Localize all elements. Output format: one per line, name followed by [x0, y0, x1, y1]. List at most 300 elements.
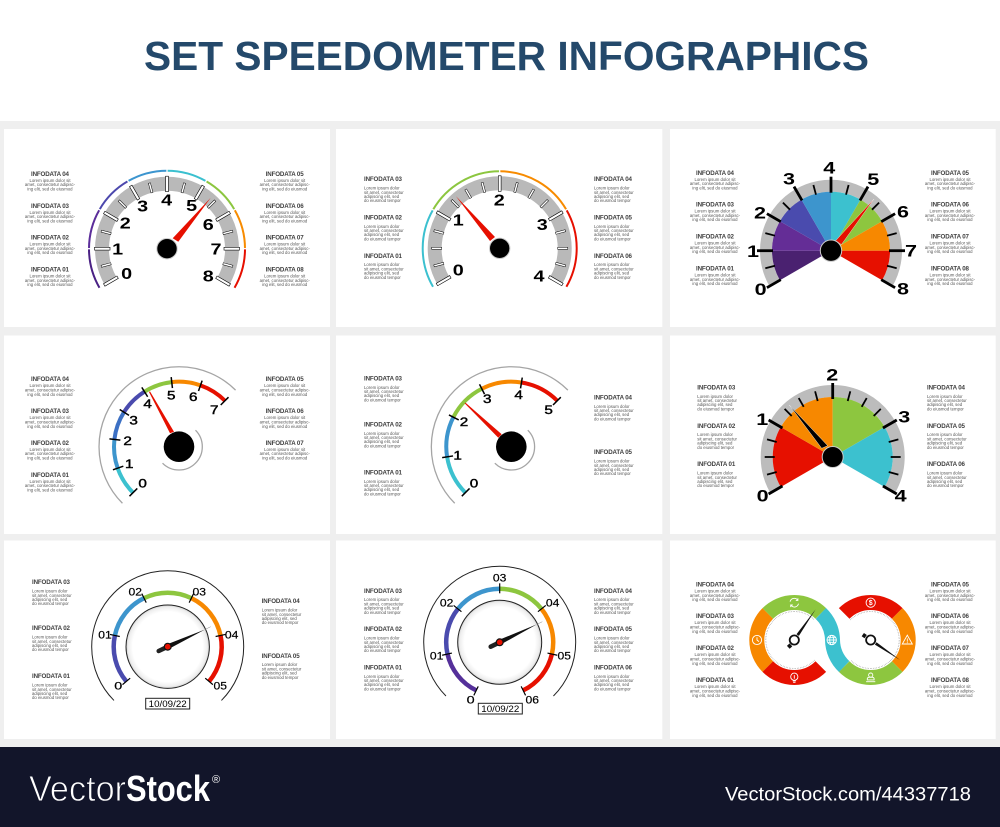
text block: INFODATA 04: Lorem ipsum dolor [594, 186, 630, 190]
text block: INFODATA 02: ing elit, sed do eiusmod [692, 661, 738, 666]
text block: INFODATA 04: do eiusmod tempor [594, 198, 631, 203]
text block: INFODATA 06: INFODATA 06 [594, 253, 633, 260]
text block: INFODATA 04 [25, 376, 76, 397]
footer logo: VectorStock: Stock [126, 768, 211, 809]
text block: INFODATA 06 [925, 202, 976, 222]
text block: INFODATA 02: INFODATA 02 [31, 440, 70, 447]
text block: INFODATA 03: INFODATA 03 [364, 588, 403, 595]
gauge numbers 0 to 7: 6 [189, 392, 198, 404]
text block: INFODATA 01: sit amet, consectetur [32, 687, 72, 692]
gauge numbers 0 to 8: 2 [754, 203, 766, 222]
text block: INFODATA 03: adipiscing elit, sed [364, 606, 400, 611]
text block: INFODATA 05: INFODATA 05 [594, 449, 633, 456]
text block: INFODATA 07: INFODATA 07 [931, 645, 970, 652]
text block: INFODATA 07: INFODATA 07 [266, 440, 304, 447]
gauge numbers 0 to 4: 2 [494, 193, 505, 210]
text block: INFODATA 02: Lorem ipsum dolor sit [29, 242, 71, 247]
text block: INFODATA 06: INFODATA 06 [266, 203, 304, 210]
icon: dollar [866, 598, 875, 607]
text block: INFODATA 06: do eiusmod tempor [594, 275, 631, 280]
text block: INFODATA 02: INFODATA 02 [696, 645, 735, 652]
text block: INFODATA 03: ing elit, sed do eiusmod [27, 424, 73, 429]
gauge numbers 0 to 7: 7 [210, 405, 219, 417]
text block: INFODATA 06: Lorem ipsum dolor sit [929, 209, 971, 214]
text block: INFODATA 03: INFODATA 03 [696, 613, 735, 620]
text block: INFODATA 04: Lorem ipsum dolor sit [694, 177, 736, 182]
text block: INFODATA 02: adipiscing elit, sed [364, 644, 400, 649]
text block: INFODATA 01: INFODATA 01 [31, 472, 70, 479]
text block: INFODATA 04: Lorem ipsum dolor sit [694, 588, 736, 593]
text block: INFODATA 01: do eiusmod tempor [364, 275, 401, 280]
text block: INFODATA 03 [364, 588, 404, 615]
text block: INFODATA 02 [690, 645, 741, 666]
gauge numbers 0 to 8: 5 [867, 170, 879, 189]
gauge numbers 0 to 5 [453, 390, 553, 490]
gauge numbers 0 to 4: 4 [534, 268, 545, 285]
text block: INFODATA 04: sit amet, consectetur [594, 602, 634, 607]
text block: INFODATA 05: amet, consectetur adipisc- [260, 182, 310, 187]
text block: INFODATA 05: ing elit, sed do eiusmod [262, 392, 308, 397]
text block: INFODATA 01: adipiscing elit, sed [697, 479, 733, 484]
text block: INFODATA 04: INFODATA 04 [696, 581, 735, 588]
text block: INFODATA 08: amet, consectetur adipisc- [925, 277, 976, 282]
text block: INFODATA 02: ing elit, sed do eiusmod [27, 456, 73, 461]
text block: INFODATA 01 [697, 461, 738, 488]
text block: INFODATA 03: do eiusmod tempor [364, 198, 401, 203]
gauge arcs and ticks [431, 367, 568, 503]
text block: INFODATA 05: Lorem ipsum dolor [594, 458, 630, 464]
gauge numbers 0 to 06: 06 [526, 694, 539, 706]
text block: INFODATA 04: INFODATA 04 [31, 376, 70, 383]
text block: INFODATA 02: Lorem ipsum dolor sit [694, 652, 736, 657]
gauge numbers 0 to 06 [430, 573, 571, 706]
text block: INFODATA 01: INFODATA 01 [364, 469, 403, 476]
text block: INFODATA 08: Lorem ipsum dolor sit [929, 272, 971, 277]
text block: INFODATA 02: INFODATA 02 [364, 215, 403, 222]
text block: INFODATA 04: adipiscing elit, sed [594, 412, 630, 417]
icon: person [866, 673, 875, 682]
text block: INFODATA 02 [25, 234, 76, 255]
gauge numbers 0 to 4: 3 [898, 408, 910, 427]
text block: INFODATA 06 [260, 408, 310, 429]
text block: INFODATA 04 [927, 384, 967, 412]
text block: INFODATA 06: sit amet, consectetur [927, 475, 967, 480]
text block: INFODATA 05: amet, consectetur adipisc- [925, 181, 976, 186]
text block: INFODATA 03 [690, 202, 741, 222]
text block: INFODATA 04: INFODATA 04 [927, 384, 966, 391]
gauge numbers 0 to 8: 0 [755, 280, 767, 299]
text block: INFODATA 04: INFODATA 04 [262, 598, 300, 605]
text block: INFODATA 02 [25, 440, 76, 460]
text block: INFODATA 07 [260, 440, 310, 460]
text block: INFODATA 05: INFODATA 05 [931, 581, 970, 588]
text block: INFODATA 02 [364, 422, 404, 448]
needle: red [149, 391, 174, 433]
text block: INFODATA 06: INFODATA 06 [594, 664, 633, 671]
text block: INFODATA 06: do eiusmod tempor [594, 686, 631, 691]
gauge numbers 0 to 06: 03 [493, 573, 506, 585]
text block: INFODATA 04: ing elit, sed do eiusmod [27, 186, 73, 191]
pie dial with sectors, grey band and ticks [765, 383, 901, 494]
text block: INFODATA 06: Lorem ipsum dolor [927, 470, 963, 476]
date box: 10/09/22 [149, 699, 187, 709]
text block: INFODATA 08: Lorem ipsum dolor sit [264, 273, 306, 278]
gauge numbers 0 to 8: 6 [203, 217, 214, 234]
text block: INFODATA 04: adipiscing elit, sed [594, 606, 630, 611]
text block: INFODATA 02: do eiusmod tempor [32, 647, 69, 652]
text block: INFODATA 05: sit amet, consectetur [927, 437, 967, 442]
text block: INFODATA 03: Lorem ipsum dolor [32, 588, 68, 594]
gauge numbers 0 to 7: 5 [167, 390, 176, 402]
text block: INFODATA 02: adipiscing elit, sed [32, 643, 68, 648]
text block: INFODATA 08 [925, 266, 976, 286]
left needle [788, 609, 816, 647]
text block: INFODATA 05: ing elit, sed do eiusmod [262, 186, 308, 191]
text block: INFODATA 01 [32, 673, 72, 700]
gauge numbers 0 to 7: 1 [125, 459, 134, 471]
text block: INFODATA 07: Lorem ipsum dolor sit [929, 241, 971, 246]
text block: INFODATA 05: Lorem ipsum dolor sit [264, 383, 306, 388]
gauge numbers 0 to 4: 4 [895, 487, 907, 506]
text block: INFODATA 02: INFODATA 02 [31, 235, 70, 242]
text block: INFODATA 04: ing elit, sed do eiusmod [692, 185, 738, 190]
text block: INFODATA 03: adipiscing elit, sed [364, 194, 400, 199]
gauge numbers 0 to 06: 05 [558, 650, 571, 662]
text block: INFODATA 03 [25, 203, 76, 224]
text block: INFODATA 01: adipiscing elit, sed [364, 270, 400, 275]
text block: INFODATA 01: Lorem ipsum dolor sit [29, 479, 71, 484]
panel: gauge 1, eight-step banded speedometer [4, 129, 330, 327]
text block: INFODATA 01: adipiscing elit, sed [32, 691, 68, 696]
text block: INFODATA 06: Lorem ipsum dolor sit [264, 210, 306, 215]
icon: light bulb [791, 673, 798, 682]
text block: INFODATA 02: amet, consectetur adipisc- [690, 245, 741, 250]
text block: INFODATA 06: amet, consectetur adipisc- [925, 213, 976, 218]
text block: INFODATA 06: INFODATA 06 [931, 202, 970, 209]
gauge numbers 0 to 8 [747, 159, 917, 299]
text block: INFODATA 04: do eiusmod tempor [927, 406, 964, 411]
text block: INFODATA 02 [364, 626, 404, 653]
text block: INFODATA 02: adipiscing elit, sed [364, 232, 400, 237]
gauge numbers 0 to 4 [453, 193, 548, 285]
text block: INFODATA 01: Lorem ipsum dolor [697, 470, 733, 476]
text block: INFODATA 04: ing elit, sed do eiusmod [692, 597, 738, 602]
text block: INFODATA 04: amet, consectetur adipisc- [690, 181, 741, 186]
text block: INFODATA 07 [260, 234, 310, 255]
text block: INFODATA 02 [364, 214, 404, 242]
text block: INFODATA 01: amet, consectetur adipisc- [25, 278, 76, 283]
text block: INFODATA 04: sit amet, consectetur [927, 398, 967, 403]
text block: INFODATA 02: do eiusmod tempor [364, 443, 401, 448]
text block: INFODATA 02: adipiscing elit, sed [697, 441, 733, 446]
text block: INFODATA 06: sit amet, consectetur [594, 678, 634, 683]
gauge numbers 0 to 8: 1 [112, 242, 124, 259]
text block: INFODATA 06: sit amet, consectetur [594, 266, 634, 271]
text block: INFODATA 02: sit amet, consectetur [364, 435, 404, 440]
text block: INFODATA 03: Lorem ipsum dolor sit [29, 210, 71, 215]
text block: INFODATA 02 [697, 423, 738, 450]
panel: gauge 4, eight-tick open arc speedometer [4, 336, 330, 534]
needle: black [789, 405, 828, 448]
text block: INFODATA 05: INFODATA 05 [262, 653, 300, 660]
text block: INFODATA 01: INFODATA 01 [697, 461, 736, 468]
text block: INFODATA 02: sit amet, consectetur [364, 228, 404, 233]
text block: INFODATA 05: adipiscing elit, sed [594, 232, 630, 237]
gauge dial with band, coloured arcs and ticks [86, 168, 248, 288]
text block: INFODATA 06: amet, consectetur adipisc- [260, 420, 310, 424]
text block: INFODATA 02: Lorem ipsum dolor sit [29, 447, 71, 452]
text block: INFODATA 01: Lorem ipsum dolor [364, 479, 400, 484]
text block: INFODATA 04: Lorem ipsum dolor sit [29, 383, 71, 388]
text block: INFODATA 06: INFODATA 06 [931, 613, 970, 620]
text block: INFODATA 06 [925, 613, 976, 634]
text block: INFODATA 01: adipiscing elit, sed [364, 487, 400, 492]
gauge numbers 0 to 4: 2 [826, 365, 838, 384]
text block: INFODATA 02 [32, 625, 72, 652]
text block: INFODATA 01 [25, 472, 76, 492]
text block: INFODATA 05 [260, 376, 310, 397]
text block: INFODATA 01: Lorem ipsum dolor sit [694, 272, 736, 277]
text block: INFODATA 02: amet, consectetur adipisc- [25, 451, 76, 456]
text block: INFODATA 08: ing elit, sed do eiusmod [927, 281, 973, 286]
text block: INFODATA 03 [697, 384, 738, 412]
gauge numbers 0 to 05: 03 [193, 587, 206, 599]
text block: INFODATA 05: ing elit, sed do eiusmod [927, 597, 973, 602]
text block: INFODATA 05 [927, 423, 967, 450]
dial with coloured arcs and ticks [424, 566, 576, 696]
text block: INFODATA 01: INFODATA 01 [364, 253, 403, 260]
text block: INFODATA 01: Lorem ipsum dolor [32, 682, 68, 688]
gauge numbers 0 to 06: 02 [440, 597, 453, 609]
text block: INFODATA 03: ing elit, sed do eiusmod [692, 217, 738, 222]
dial with coloured arcs and ticks [92, 571, 244, 700]
text block: INFODATA 06: Lorem ipsum dolor [594, 262, 630, 267]
text block: INFODATA 01: sit amet, consectetur [364, 483, 404, 488]
text block: INFODATA 03: Lorem ipsum dolor [364, 385, 400, 390]
text block: INFODATA 01: INFODATA 01 [364, 664, 403, 671]
gauge numbers 0 to 8: 5 [186, 198, 198, 215]
text block: INFODATA 03: INFODATA 03 [31, 203, 70, 210]
text block: INFODATA 05: INFODATA 05 [931, 170, 970, 177]
text block: INFODATA 03: Lorem ipsum dolor sit [29, 415, 71, 420]
needle hub [820, 240, 842, 261]
text block: INFODATA 01: do eiusmod tempor [364, 491, 401, 496]
text block: INFODATA 05: do eiusmod tempor [262, 675, 299, 680]
footer bar [0, 747, 1000, 827]
text block: INFODATA 06: adipiscing elit, sed [594, 270, 630, 275]
text block: INFODATA 03: sit amet, consectetur [364, 389, 404, 394]
text block: INFODATA 01: INFODATA 01 [696, 677, 735, 684]
text block: INFODATA 04 [25, 171, 76, 192]
text block: INFODATA 03: sit amet, consectetur [364, 602, 404, 607]
gauge numbers 0 to 7: 3 [129, 415, 138, 427]
text block: INFODATA 03: sit amet, consectetur [364, 190, 404, 195]
text block: INFODATA 04: adipiscing elit, sed [594, 194, 630, 199]
text block: INFODATA 04: ing elit, sed do eiusmod [27, 392, 73, 397]
gauge numbers 0 to 7: 2 [123, 436, 132, 448]
text block: INFODATA 03: Lorem ipsum dolor [697, 394, 733, 399]
text block: INFODATA 04: Lorem ipsum dolor [594, 404, 630, 409]
text block: INFODATA 01: adipiscing elit, sed [364, 682, 400, 687]
text block: INFODATA 05: adipiscing elit, sed [927, 441, 963, 446]
text block: INFODATA 04: amet, consectetur adipisc- [690, 593, 741, 598]
text block: INFODATA 02: Lorem ipsum dolor sit [694, 241, 736, 246]
text block: INFODATA 06: Lorem ipsum dolor [594, 674, 630, 679]
text block: INFODATA 03: amet, consectetur adipisc- [690, 624, 741, 630]
gauge numbers 0 to 8: 8 [897, 279, 909, 298]
text block: INFODATA 04: INFODATA 04 [31, 171, 70, 178]
panel: gauge 5, five-tick open arc speedometer [336, 336, 662, 534]
text block: INFODATA 08: INFODATA 08 [266, 266, 304, 273]
title: SET SPEEDOMETER INFOGRAPHICS [144, 33, 869, 79]
text block: INFODATA 01: ing elit, sed do eiusmod [27, 282, 73, 287]
text block: INFODATA 01: Lorem ipsum dolor [364, 262, 400, 267]
text block: INFODATA 01: amet, consectetur adipisc- [690, 688, 741, 694]
text block: INFODATA 04: INFODATA 04 [594, 176, 633, 183]
text block: INFODATA 01: sit amet, consectetur [697, 475, 738, 480]
text block: INFODATA 01: amet, consectetur adipisc- [25, 483, 76, 488]
text block: INFODATA 05: do eiusmod tempor [594, 648, 631, 653]
panel: gauge 9, infinity double dial with icons [670, 540, 996, 739]
text block: INFODATA 04: INFODATA 04 [594, 588, 633, 595]
text block: INFODATA 05 [260, 171, 310, 192]
panel: gauge 3, eight-sector pie speedometer [670, 129, 996, 327]
text block: INFODATA 02: INFODATA 02 [696, 234, 735, 241]
text block: INFODATA 08: Lorem ipsum dolor sit [929, 684, 971, 689]
text block: INFODATA 05: sit amet, consectetur [262, 667, 302, 672]
text block: INFODATA 03: INFODATA 03 [32, 579, 71, 586]
needle: red [465, 403, 502, 438]
text block: INFODATA 02: amet, consectetur adipisc- [690, 656, 741, 662]
text block: INFODATA 07: amet, consectetur adipisc- [260, 451, 310, 456]
gauge numbers 0 to 4: 3 [537, 217, 548, 234]
text block: INFODATA 04: Lorem ipsum dolor [927, 394, 963, 399]
text block: INFODATA 03: Lorem ipsum dolor [364, 186, 400, 190]
dotted dial scales [766, 611, 899, 668]
text block: INFODATA 01: Lorem ipsum dolor [364, 674, 400, 679]
panel: gauge 6, four-sector pie speedometer [670, 336, 996, 534]
text block: INFODATA 06: ing elit, sed do eiusmod [927, 629, 973, 634]
needle hub [496, 431, 527, 462]
text block: INFODATA 05: adipiscing elit, sed [594, 644, 630, 649]
gauge numbers 0 to 4 [756, 365, 910, 506]
text block: INFODATA 01: Lorem ipsum dolor sit [29, 273, 71, 278]
text block: INFODATA 05 [925, 170, 976, 190]
text block: INFODATA 06: ing elit, sed do eiusmod [927, 217, 973, 222]
text block: INFODATA 03: do eiusmod tempor [697, 406, 735, 411]
panel: gauge 7, five-segment round dial with date [4, 540, 330, 739]
text block: INFODATA 07 [925, 234, 976, 254]
text block: INFODATA 03 [364, 176, 404, 203]
gauge numbers 0 to 8: 6 [897, 203, 909, 222]
gauge numbers 0 to 8: 7 [905, 242, 917, 261]
text block: INFODATA 03 [32, 579, 72, 606]
icon: dollar: $ [869, 600, 873, 607]
text block: INFODATA 05: sit amet, consectetur [594, 640, 634, 645]
needle: red [836, 199, 874, 245]
text block: INFODATA 03: do eiusmod tempor [32, 601, 69, 606]
text block: INFODATA 03: INFODATA 03 [31, 408, 70, 415]
gauge numbers 0 to 4: 0 [453, 263, 464, 280]
text block: INFODATA 01: INFODATA 01 [31, 266, 70, 273]
text block: INFODATA 04: do eiusmod tempor [594, 610, 631, 615]
text block: INFODATA 02: INFODATA 02 [32, 625, 71, 632]
text block: INFODATA 04: do eiusmod tempor [594, 416, 631, 421]
text block: INFODATA 04: Lorem ipsum dolor sit [29, 178, 71, 183]
text block: INFODATA 02: ing elit, sed do eiusmod [692, 249, 738, 254]
text block: INFODATA 05: INFODATA 05 [266, 171, 304, 178]
text block: INFODATA 02: sit amet, consectetur [364, 640, 404, 645]
text block: INFODATA 05: Lorem ipsum dolor [262, 662, 298, 667]
text block: INFODATA 02: do eiusmod tempor [364, 648, 401, 653]
text block: INFODATA 04: Lorem ipsum dolor [594, 597, 630, 602]
text block: INFODATA 04: INFODATA 04 [696, 170, 735, 177]
text block: INFODATA 05 [594, 449, 634, 476]
text block: INFODATA 02: Lorem ipsum dolor [32, 634, 68, 640]
text block: INFODATA 04 [594, 588, 634, 615]
text block: INFODATA 06: adipiscing elit, sed [594, 682, 630, 687]
text block: INFODATA 04: adipiscing elit, sed [927, 402, 963, 407]
text block: INFODATA 01: sit amet, consectetur [364, 266, 404, 271]
text block: INFODATA 04 [690, 582, 741, 602]
text block: INFODATA 01: ing elit, sed do eiusmod [692, 693, 738, 698]
text block: INFODATA 04: Lorem ipsum dolor [262, 608, 298, 612]
needle: black with red hub [159, 627, 211, 651]
text block: INFODATA 06: ing elit, sed do eiusmod [262, 424, 308, 429]
text block: INFODATA 03: do eiusmod tempor [364, 397, 401, 402]
text block: INFODATA 03: amet, consectetur adipisc- [25, 214, 76, 219]
text block: INFODATA 05: do eiusmod tempor [927, 445, 964, 450]
text block: INFODATA 02: ing elit, sed do eiusmod [27, 250, 73, 255]
gauge numbers 0 to 05: 04 [225, 630, 238, 642]
text block: INFODATA 03: Lorem ipsum dolor [364, 597, 400, 602]
text block: INFODATA 04: do eiusmod tempor [262, 620, 299, 625]
gauge numbers 0 to 5: 1 [453, 450, 462, 462]
gauge numbers 0 to 4: 1 [453, 213, 464, 230]
text block: INFODATA 01: do eiusmod tempor [32, 695, 69, 700]
gauge numbers 0 to 05: 01 [98, 630, 112, 642]
gauge arcs and ticks [99, 367, 236, 503]
text block: INFODATA 01 [364, 470, 404, 496]
text block: INFODATA 03: ing elit, sed do eiusmod [27, 218, 73, 223]
gauge numbers 0 to 7 [123, 390, 219, 490]
text block: INFODATA 06 [594, 664, 634, 692]
text block: INFODATA 05: INFODATA 05 [927, 423, 966, 430]
text block: INFODATA 06 [260, 203, 310, 224]
gauge numbers 0 to 4: 1 [756, 410, 768, 429]
text block: INFODATA 03: adipiscing elit, sed [364, 393, 400, 398]
text block: INFODATA 08: ing elit, sed do eiusmod [927, 693, 973, 698]
text block: INFODATA 07: ing elit, sed do eiusmod [262, 250, 308, 255]
gauge numbers 0 to 05: 05 [214, 680, 227, 692]
infinity ring segments [757, 602, 908, 678]
text block: INFODATA 03: sit amet, consectetur [32, 593, 72, 598]
icon: clock [752, 635, 762, 645]
text block: INFODATA 05: do eiusmod tempor [594, 237, 631, 242]
gauge numbers 0 to 8: 1 [747, 242, 759, 261]
text block: INFODATA 06: do eiusmod tempor [927, 483, 964, 488]
text block: INFODATA 05: ing elit, sed do eiusmod [927, 185, 973, 190]
text block: INFODATA 04: adipiscing elit, sed [262, 616, 297, 621]
text block: INFODATA 06 [594, 253, 634, 280]
date box: 10/09/22 [481, 704, 519, 714]
text block: INFODATA 02: adipiscing elit, sed [364, 439, 400, 444]
text block: INFODATA 03: adipiscing elit, sed [32, 597, 68, 602]
text block: INFODATA 02: INFODATA 02 [364, 626, 403, 633]
text block: INFODATA 02: Lorem ipsum dolor [364, 224, 400, 229]
text block: INFODATA 03: sit amet, consectetur [697, 398, 738, 403]
text block: INFODATA 01: INFODATA 01 [32, 673, 71, 680]
